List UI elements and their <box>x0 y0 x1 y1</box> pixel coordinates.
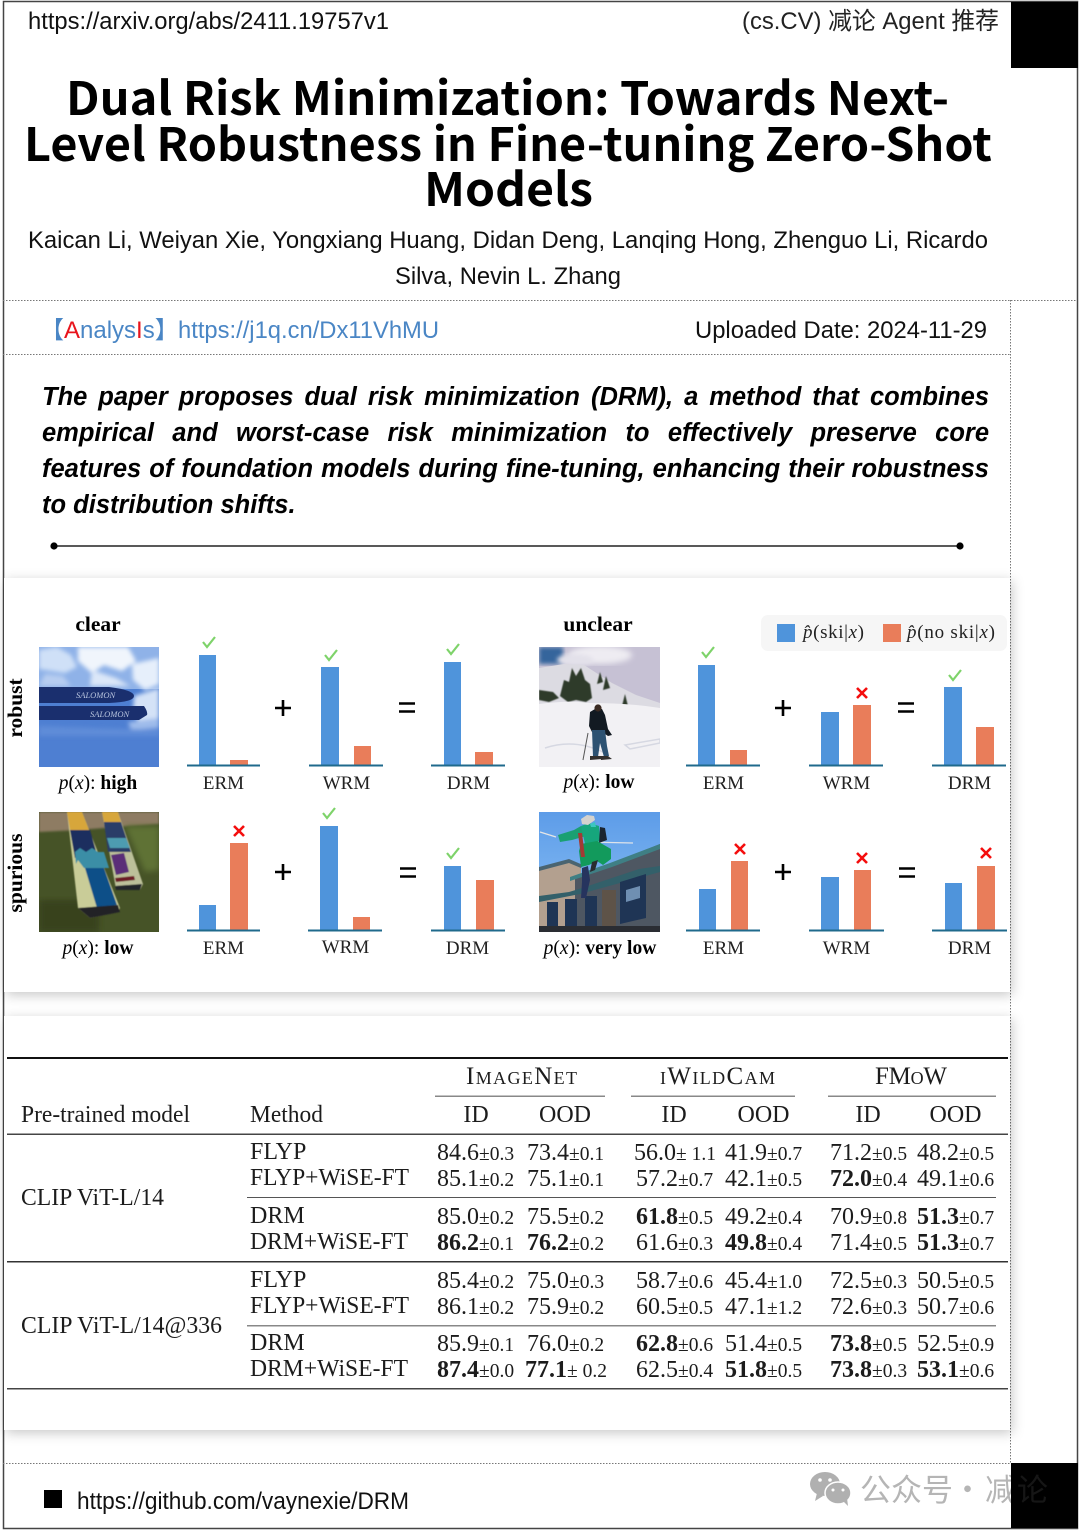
bar chart: clear spurious ERM: ERM <box>203 938 244 959</box>
row: FLYP+WiSE-FT @336: 75.9±0.2 <box>527 1294 604 1320</box>
bar chart: unclear spurious DRM: DRM <box>948 938 991 959</box>
row: FLYP @336: 50.5±0.5 <box>917 1268 994 1294</box>
bar chart: unclear robust ERM <box>686 665 760 794</box>
photo: skis on snow: SALOMON <box>76 690 117 700</box>
bar chart: unclear robust ERM: ERM <box>703 773 744 794</box>
row: FLYP+WiSE-FT @336: 60.5±0.5 <box>636 1294 713 1320</box>
row: FLYP+WiSE-FT @336: 47.1±1.2 <box>725 1294 802 1320</box>
authors <box>28 227 988 290</box>
bar charts <box>187 655 1007 959</box>
row label: robust: robust <box>3 677 27 738</box>
row: DRM+WiSE-FT @336: DRM+WiSE-FT <box>250 1356 408 1382</box>
watermark text <box>862 1474 1011 1504</box>
row: FLYP+WiSE-FT L/14: 72.0±0.4 <box>830 1166 907 1192</box>
watermark text over black block: 论 <box>1017 1465 1048 1510</box>
row: FLYP L/14: 71.2±0.5 <box>830 1140 907 1166</box>
row: FLYP L/14 <box>250 1139 994 1166</box>
row: DRM @336 <box>250 1330 994 1357</box>
photo: skis on snow: SALOMON <box>90 709 131 719</box>
row: DRM L/14: 85.0±0.2 <box>437 1204 514 1230</box>
title: Dual Risk Minimization: Towards Next- <box>66 63 949 129</box>
model label: CLIP ViT-L/14@336: CLIP ViT-L/14@336 <box>21 1313 222 1339</box>
bar chart: clear robust ERM: ERM <box>203 773 244 794</box>
row: DRM+WiSE-FT @336: 53.1±0.6 <box>917 1357 994 1383</box>
table header: columns: ID <box>463 1102 489 1128</box>
results table <box>7 1057 1008 1390</box>
heading: unclear: unclear <box>563 612 633 636</box>
legend: p̂(ski|x) <box>801 622 864 643</box>
bar chart: clear spurious WRM: WRM <box>322 937 369 958</box>
summary paragraph: empirical and worst-case risk minimization to effectively preserve core <box>42 419 989 447</box>
panel: figure background <box>4 578 1010 992</box>
row: DRM @336: 73.8±0.5 <box>830 1331 907 1357</box>
row: FLYP+WiSE-FT L/14: 42.1±0.5 <box>725 1166 802 1192</box>
row: DRM+WiSE-FT @336: 62.5±0.4 <box>636 1357 713 1383</box>
analysis link <box>40 317 439 344</box>
table header: columns: ID <box>855 1102 881 1128</box>
row: FLYP @336: 72.5±0.3 <box>830 1268 907 1294</box>
caption: p(x) low, clear: p(x): low <box>61 938 133 959</box>
table header: columns: Method <box>250 1102 323 1128</box>
bar chart: unclear spurious WRM <box>809 870 884 959</box>
table header: dataset names: iWildCam <box>660 1063 775 1090</box>
row: DRM L/14: 61.8±0.5 <box>636 1204 713 1230</box>
row: DRM+WiSE-FT L/14: 71.4±0.5 <box>830 1230 907 1256</box>
bar chart: clear robust DRM: DRM <box>447 773 490 794</box>
row: DRM L/14: 51.3±0.7 <box>917 1204 994 1230</box>
icons: red crosses <box>234 688 991 863</box>
row: FLYP+WiSE-FT @336: 72.6±0.3 <box>830 1294 907 1320</box>
legend <box>761 615 1007 651</box>
row: DRM+WiSE-FT L/14: 61.6±0.3 <box>636 1230 713 1256</box>
row: DRM+WiSE-FT @336: 77.1± 0.2 <box>525 1357 607 1383</box>
row: FLYP @336 <box>250 1267 994 1294</box>
arXiv link: https://arxiv.org/abs/2411.19757v1 <box>28 8 389 35</box>
summary paragraph <box>42 383 989 519</box>
summary paragraph: The paper proposes dual risk minimization (DRM), a method that combines <box>42 383 989 411</box>
bar chart: unclear robust DRM <box>932 687 1006 794</box>
row: FLYP @336: 75.0±0.3 <box>527 1268 604 1294</box>
row: FLYP+WiSE-FT @336: FLYP+WiSE-FT <box>250 1293 409 1319</box>
row: DRM+WiSE-FT L/14: DRM+WiSE-FT <box>250 1229 408 1255</box>
bar chart: clear spurious DRM: DRM <box>446 938 489 959</box>
row: FLYP+WiSE-FT L/14: 75.1±0.1 <box>527 1166 604 1192</box>
watermark text: · <box>952 1465 983 1510</box>
row: FLYP+WiSE-FT L/14: 57.2±0.7 <box>636 1166 713 1192</box>
bar chart: clear spurious ERM <box>187 843 260 959</box>
watermark: WeChat account <box>810 1472 1047 1506</box>
photo: skis on grass <box>39 812 159 932</box>
row: FLYP+WiSE-FT @336: 86.1±0.2 <box>437 1294 514 1320</box>
row: DRM @336: 85.9±0.1 <box>437 1331 514 1357</box>
caption: p(x) low, unclear: p(x): low <box>562 772 634 793</box>
caption: p(x) high: p(x): high <box>57 773 137 794</box>
row: FLYP @336: 45.4±1.0 <box>725 1268 802 1294</box>
operators: equals signs <box>399 704 915 876</box>
row: FLYP+WiSE-FT @336 <box>250 1293 994 1320</box>
upload date: Uploaded Date: 2024-11-29 <box>695 317 987 344</box>
table header: columns: OOD <box>738 1102 790 1128</box>
bar chart: clear robust WRM: WRM <box>323 773 370 794</box>
row: FLYP+WiSE-FT L/14: 49.1±0.6 <box>917 1166 994 1192</box>
heading: clear: clear <box>75 612 121 636</box>
row: FLYP @336: FLYP <box>250 1267 306 1293</box>
title: Level Robustness in Fine-tuning Zero-Shot <box>24 109 992 175</box>
row: FLYP @336: 85.4±0.2 <box>437 1268 514 1294</box>
photo: skier on slope <box>539 646 660 767</box>
table header: dataset names <box>466 1063 947 1090</box>
row: DRM+WiSE-FT L/14: 76.2±0.2 <box>527 1230 604 1256</box>
divider with end dots <box>50 542 964 550</box>
bar chart: unclear spurious WRM: WRM <box>823 938 870 959</box>
table header: dataset names: ImageNet <box>466 1063 577 1090</box>
title: Models <box>424 154 593 220</box>
row: DRM @336: 51.4±0.5 <box>725 1331 802 1357</box>
title <box>24 63 992 220</box>
caption: p(x) very low: p(x): very low <box>542 938 656 959</box>
row: DRM+WiSE-FT @336: 73.8±0.3 <box>830 1357 907 1383</box>
row: FLYP L/14: 56.0± 1.1 <box>634 1140 716 1166</box>
row: DRM L/14: 75.5±0.2 <box>527 1204 604 1230</box>
row: DRM L/14 <box>250 1203 994 1230</box>
bar chart: clear robust ERM <box>187 655 260 794</box>
row: DRM+WiSE-FT L/14 <box>250 1229 994 1256</box>
black corner block: top right <box>1011 2 1078 68</box>
table header: columns <box>21 1102 982 1128</box>
bar chart: unclear robust WRM: WRM <box>823 773 870 794</box>
row: DRM+WiSE-FT @336: 87.4±0.0 <box>437 1357 514 1383</box>
analysis link: https://j1q.cn/Dx11VhMU <box>178 317 439 344</box>
row: DRM L/14: DRM <box>250 1203 305 1229</box>
bar chart: unclear spurious ERM <box>686 861 760 959</box>
model label: CLIP ViT-L/14: CLIP ViT-L/14 <box>21 1185 164 1211</box>
bar chart: unclear robust WRM <box>809 705 883 794</box>
row: FLYP+WiSE-FT L/14 <box>250 1165 994 1192</box>
bar chart: clear robust WRM <box>309 667 383 794</box>
table header: columns: ID <box>661 1102 687 1128</box>
photo: skis on snow <box>39 647 159 767</box>
summary paragraph: to distribution shifts. <box>42 491 296 519</box>
bar chart: clear spurious DRM <box>431 866 505 959</box>
row: FLYP @336: 58.7±0.6 <box>636 1268 713 1294</box>
row: FLYP L/14: 48.2±0.5 <box>917 1140 994 1166</box>
authors: Kaican Li, Weiyan Xie, Yongxiang Huang, Didan Deng, Lanqing Hong, Zhenguo Li, Ricardo <box>28 227 988 254</box>
bar chart: unclear robust DRM: DRM <box>948 773 991 794</box>
row: DRM+WiSE-FT @336 <box>250 1356 994 1383</box>
table header: dataset names: FMoW <box>875 1063 947 1090</box>
watermark text: 减 <box>985 1465 1016 1510</box>
row: DRM @336: 52.5±0.9 <box>917 1331 994 1357</box>
row: DRM+WiSE-FT L/14: 86.2±0.1 <box>437 1230 514 1256</box>
row: FLYP+WiSE-FT L/14: FLYP+WiSE-FT <box>250 1165 409 1191</box>
row: FLYP+WiSE-FT @336: 50.7±0.6 <box>917 1294 994 1320</box>
row: DRM+WiSE-FT @336: 51.8±0.5 <box>725 1357 802 1383</box>
icon: WeChat bubbles <box>810 1472 851 1506</box>
row: FLYP L/14: 41.9±0.7 <box>725 1140 802 1166</box>
legend: p̂(no ski|x) <box>905 622 995 643</box>
operators: plus signs <box>275 700 791 880</box>
table header: columns: OOD <box>539 1102 591 1128</box>
photo: skier jumping <box>539 812 660 932</box>
bar chart: unclear spurious DRM <box>932 866 1007 959</box>
row: FLYP L/14: 73.4±0.1 <box>527 1140 604 1166</box>
analysis link: 【AnalysIs】 <box>40 317 179 344</box>
row: DRM L/14: 49.2±0.4 <box>725 1204 802 1230</box>
row: FLYP L/14: 84.6±0.3 <box>437 1140 514 1166</box>
authors: Silva, Nevin L. Zhang <box>395 263 621 290</box>
row: FLYP+WiSE-FT L/14: 85.1±0.2 <box>437 1166 514 1192</box>
GitHub link: https://github.com/vaynexie/DRM <box>77 1488 409 1515</box>
icons: green check marks <box>203 637 961 858</box>
bar chart: clear robust DRM <box>431 662 505 794</box>
row label: spurious: spurious <box>3 834 27 912</box>
bar chart: unclear spurious ERM: ERM <box>703 938 744 959</box>
row: DRM+WiSE-FT L/14: 51.3±0.7 <box>917 1230 994 1256</box>
row: FLYP L/14: FLYP <box>250 1139 306 1165</box>
row: DRM @336: 76.0±0.2 <box>527 1331 604 1357</box>
row: DRM @336: DRM <box>250 1330 305 1356</box>
figure: risk minimization comparison <box>3 612 1007 959</box>
watermark text: 公众号 <box>860 1465 953 1510</box>
summary paragraph: features of foundation models during fine-tuning, enhancing their robustness <box>42 455 989 483</box>
panel: table background <box>4 1016 1010 1430</box>
icon: footer square bullet <box>44 1490 62 1508</box>
row: DRM @336: 62.8±0.6 <box>636 1331 713 1357</box>
table header: columns: OOD <box>930 1102 982 1128</box>
table header: columns: Pre-trained model <box>21 1102 190 1128</box>
row: DRM L/14: 70.9±0.8 <box>830 1204 907 1230</box>
bar chart: clear spurious WRM <box>308 826 382 958</box>
source tag: (cs.CV) 减论 Agent 推荐 <box>742 8 999 35</box>
row: DRM+WiSE-FT L/14: 49.8±0.4 <box>725 1230 802 1256</box>
black corner block: bottom right <box>1011 1463 1078 1528</box>
